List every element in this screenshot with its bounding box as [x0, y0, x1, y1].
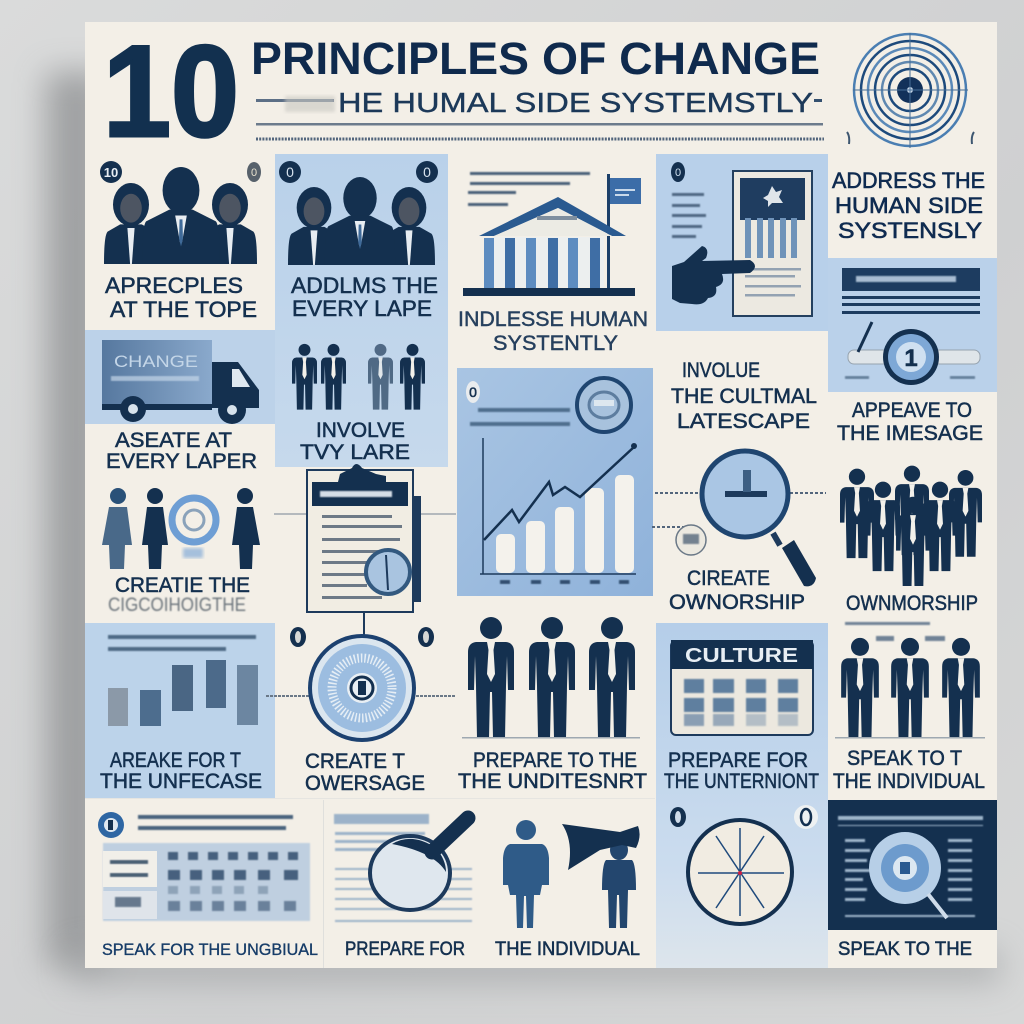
badge	[279, 161, 301, 183]
label: address the human side	[832, 168, 985, 243]
label	[108, 574, 250, 616]
label: involve the cultural landscape: INVOLUE	[682, 359, 760, 382]
label: OWERSAGE	[305, 772, 425, 795]
label	[291, 273, 438, 321]
badge: 0	[423, 164, 431, 180]
panel: clipboard	[274, 464, 456, 636]
panel: institution building	[458, 172, 648, 355]
badge: 10	[104, 165, 118, 180]
people busts	[104, 167, 257, 264]
badge	[247, 162, 261, 182]
people busts	[288, 177, 435, 265]
label: AT THE TOPE	[110, 297, 257, 322]
fine print	[838, 816, 983, 917]
label: APRECPLES	[105, 273, 243, 298]
icon: document	[733, 171, 812, 316]
label	[458, 749, 647, 793]
label	[106, 429, 257, 473]
screen	[671, 640, 813, 735]
panel: appeal badge	[842, 268, 980, 385]
badge	[98, 812, 124, 838]
icon: pointing hand	[672, 246, 755, 304]
stripes	[842, 296, 980, 314]
icon: person	[602, 840, 636, 928]
label: involve the cultural landscape: THE CULTMAL	[671, 385, 817, 408]
badge: 0	[286, 164, 294, 180]
panel: leaders at the top	[100, 161, 261, 322]
label	[305, 750, 425, 795]
label: THE UNTERNIONT	[664, 770, 819, 793]
icon: dial	[308, 634, 416, 742]
magnifier	[577, 378, 631, 432]
badge	[671, 162, 685, 182]
label: INDLESSE HUMAN	[458, 308, 648, 331]
label: OWNORSHIP	[669, 591, 805, 614]
label: OWNMORSHIP	[846, 592, 978, 615]
label: SPEAK FOR THE UNGBIUAL	[102, 940, 318, 959]
panel: involve people row	[292, 344, 425, 464]
panel: group of people	[840, 466, 982, 615]
icon: magnifier	[370, 818, 468, 910]
icon: magnifier	[869, 832, 947, 918]
label: CREATE T	[305, 750, 405, 773]
screen: CULTURE	[685, 645, 798, 667]
icon: truck: CHANGE	[114, 352, 198, 371]
icon: compass	[688, 820, 792, 924]
dashboard	[103, 843, 310, 921]
label: PREPARE FOR	[668, 749, 808, 772]
panel: every layer	[279, 161, 438, 321]
badge: 0	[675, 167, 681, 179]
badge	[466, 381, 480, 403]
people group	[840, 466, 982, 586]
label: CIREATE	[687, 567, 770, 590]
label: address the human side: ADDRESS THE	[832, 168, 985, 193]
subtitle: HE HUMAL SIDE SYSTEMSTLY	[338, 87, 813, 118]
badge: 0	[469, 384, 477, 400]
badge	[670, 807, 686, 827]
label: EVERY LAPE	[292, 296, 432, 321]
label	[833, 747, 985, 793]
panel: magnifier ownership	[652, 451, 826, 614]
label: involve the cultural landscape: LATESCAPE	[677, 410, 810, 433]
badge	[416, 161, 438, 183]
panel: three suited figures	[458, 617, 647, 793]
icon: dial badge: 1	[904, 345, 918, 372]
fine print	[468, 172, 590, 206]
label: appeal to the message: APPEAVE TO	[852, 399, 972, 422]
fine print	[672, 193, 706, 238]
icon: magnifier	[702, 451, 816, 586]
icon: truck	[102, 340, 259, 424]
panel: dark checklist	[828, 800, 997, 930]
badge	[794, 805, 818, 829]
fine print	[470, 408, 570, 426]
people	[102, 488, 260, 569]
label	[669, 567, 805, 614]
label: SPEAK TO T	[847, 747, 962, 770]
badge	[290, 627, 306, 647]
panel: magnifier over text	[334, 814, 472, 960]
label	[300, 419, 410, 464]
label: TVY LARE	[300, 441, 410, 464]
label: address the human side: SYSTENSLY	[838, 218, 982, 243]
bars	[496, 475, 634, 573]
label: involve the cultural landscape	[671, 359, 817, 433]
fine print	[138, 815, 293, 830]
label: THE UNDITESNRT	[458, 770, 647, 793]
panel: business case bars	[100, 635, 262, 793]
label: THE UNFECASE	[100, 770, 262, 793]
panel: compass	[670, 805, 818, 924]
icon: ring	[172, 498, 216, 558]
label	[458, 308, 648, 355]
icon: building with flag	[463, 174, 641, 296]
panel: blue backgrounds	[85, 154, 997, 968]
panel: people and ring	[102, 488, 260, 616]
panel: culture screen	[664, 640, 819, 793]
panel: dial ownership	[266, 627, 455, 795]
icon: person	[503, 820, 549, 928]
subtitle	[256, 87, 824, 139]
people	[462, 617, 640, 738]
people	[835, 638, 985, 738]
label: ADDLMS THE	[291, 273, 438, 298]
label: address the human side: HUMAN SIDE	[835, 193, 983, 218]
panel: change truck	[102, 340, 259, 473]
bar chart	[457, 368, 653, 596]
panel: bottom left dashboard	[98, 812, 318, 959]
label: ASEATE AT	[115, 429, 232, 452]
label: PREPARE FOR	[345, 939, 465, 960]
label: appeal to the message	[837, 399, 983, 445]
icon: coin	[676, 525, 706, 555]
icon: megaphone	[562, 824, 640, 870]
icon: concentric target	[847, 33, 974, 148]
people	[292, 344, 425, 410]
label: appeal to the message: THE IMESAGE	[837, 422, 983, 445]
label: INVOLVE	[316, 419, 405, 442]
panel: document with pointing hand	[671, 162, 812, 316]
panel: speak to the individual	[833, 622, 985, 793]
axis ticks	[500, 580, 629, 584]
fine print	[108, 635, 256, 651]
label	[664, 749, 819, 793]
header bar	[842, 268, 980, 291]
label: CREATIE THE	[115, 574, 250, 597]
badge	[418, 627, 434, 647]
big number 10: 10	[103, 18, 239, 164]
label: PREPARE TO THE	[473, 749, 637, 772]
axes	[480, 438, 636, 574]
fine print	[845, 622, 945, 641]
label: EVERY LAPER	[106, 450, 257, 473]
stripes	[334, 814, 472, 922]
badge	[100, 161, 122, 183]
label: CIGCOIHOIGTHE	[108, 595, 246, 616]
label: SYSTENTLY	[493, 332, 618, 355]
label: AREAKE FOR T	[110, 749, 241, 772]
label	[100, 749, 262, 793]
label	[105, 273, 257, 322]
badge: 0	[251, 167, 257, 179]
panel: person with megaphone	[495, 820, 640, 960]
label: THE INDIVIDUAL	[833, 770, 985, 793]
bars	[108, 660, 258, 726]
trend line	[484, 443, 637, 540]
label: speak to the: SPEAK TO THE	[838, 939, 972, 960]
label: THE INDIVIDUAL	[495, 939, 640, 960]
title: PRINCIPLES OF CHANGE	[251, 33, 820, 84]
